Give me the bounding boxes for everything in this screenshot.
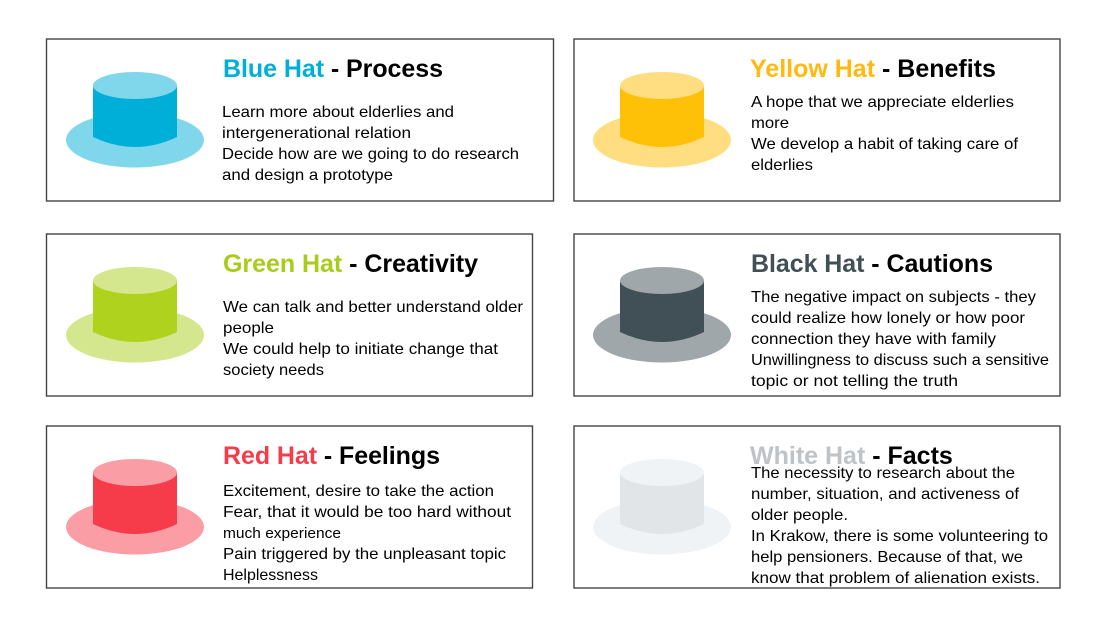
- text: red hat body: Excitement, desire to take the action: [223, 483, 494, 500]
- text: yellow hat body: more: [751, 115, 789, 132]
- text: black hat body: The negative impact on subjects - they: [751, 289, 1036, 306]
- text: blue hat body: [222, 104, 519, 184]
- heading: green hat creativity: Green Hat - Creativity: [223, 250, 478, 278]
- text: yellow hat body: A hope that we appreciate elderlies: [751, 94, 1014, 111]
- text: white hat body: number, situation, and activeness of: [751, 486, 1020, 503]
- text: green hat body: We can talk and better understand older: [223, 299, 524, 316]
- panel: yellow hat benefits: [574, 39, 1060, 201]
- text: white hat body: In Krakow, there is some volunteering to: [751, 528, 1048, 545]
- heading: red hat feelings: Red Hat - Feelings: [223, 442, 440, 470]
- heading: blue hat process: Blue Hat - Process: [223, 55, 443, 83]
- panel: red hat feelings: [46, 426, 532, 588]
- icon: yellow hat: [593, 72, 731, 168]
- text: black hat body: topic or not telling the truth: [751, 373, 958, 390]
- text: green hat body: [223, 299, 524, 379]
- heading: black hat cautions: Black Hat - Cautions: [751, 250, 993, 278]
- text: blue hat body: and design a prototype: [222, 167, 393, 184]
- text: red hat body: Helplessness: [223, 567, 318, 584]
- panel: black hat cautions: [574, 234, 1060, 396]
- heading: white hat facts: White Hat - Facts: [750, 442, 953, 470]
- text: white hat body: [751, 465, 1048, 587]
- text: red hat body: [223, 483, 512, 584]
- icon: black hat: [593, 267, 731, 362]
- icon: red hat: [66, 459, 204, 554]
- text: black hat body: could realize how lonely or how poor: [751, 310, 1026, 327]
- icon: white hat: [593, 459, 731, 554]
- text: white hat body: help pensioners. Because of that, we: [751, 549, 1023, 566]
- text: red hat body: much experience: [223, 525, 341, 542]
- text: yellow hat body: [751, 94, 1019, 174]
- text: black hat body: connection they have with family: [751, 331, 996, 348]
- text: green hat body: We could help to initiate change that: [223, 341, 499, 358]
- text: yellow hat body: We develop a habit of taking care of: [751, 136, 1019, 153]
- panel: blue hat process: [46, 39, 554, 201]
- text: red hat body: Fear, that it would be too hard without: [223, 504, 512, 521]
- text: black hat body: Unwillingness to discuss such a sensitive: [751, 352, 1049, 369]
- text: white hat body: older people.: [751, 507, 848, 524]
- text: green hat body: people: [223, 320, 274, 337]
- text: white hat body: The necessity to research about the: [751, 465, 1015, 482]
- text: green hat body: society needs: [223, 362, 324, 379]
- text: blue hat body: Learn more about elderlies and: [222, 104, 454, 121]
- text: blue hat body: intergenerational relation: [222, 125, 411, 142]
- icon: green hat: [66, 267, 204, 362]
- text: white hat body: know that problem of alienation exists.: [751, 570, 1040, 587]
- text: red hat body: Pain triggered by the unpleasant topic: [223, 546, 506, 563]
- icon: blue hat: [66, 72, 204, 168]
- text: black hat body: [751, 289, 1049, 390]
- panel: white hat facts: [574, 426, 1060, 588]
- panel: green hat creativity: [46, 234, 532, 396]
- text: yellow hat body: elderlies: [751, 157, 813, 174]
- text: blue hat body: Decide how are we going to do research: [222, 146, 519, 163]
- heading: yellow hat benefits: Yellow Hat - Benefits: [750, 55, 996, 83]
